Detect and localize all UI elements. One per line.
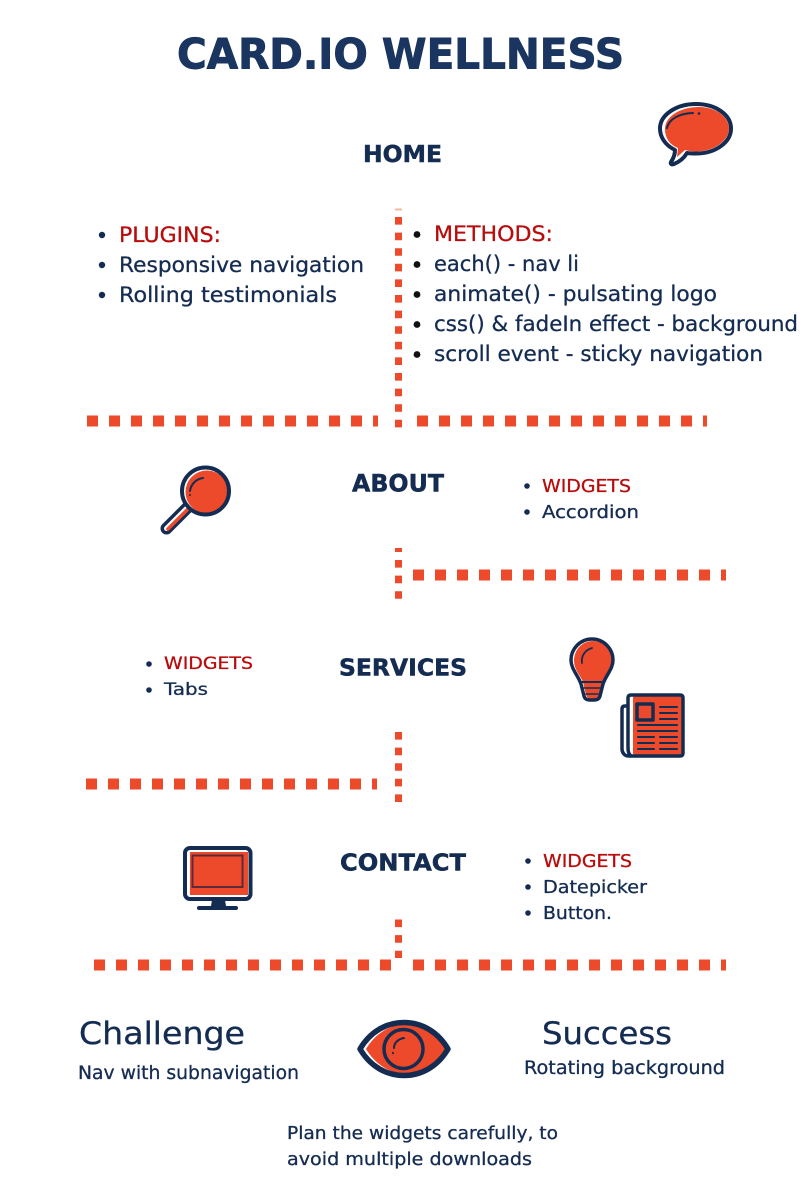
icon: eye [360, 1022, 448, 1076]
icon: monitor [185, 848, 250, 908]
list: contact widgets [525, 851, 648, 924]
list: services widgets [146, 654, 253, 700]
text: closing note [287, 1123, 558, 1170]
list: contact widgets: WIDGETS [543, 851, 632, 872]
list: plugins: PLUGINS: [119, 223, 221, 247]
list: about widgets: WIDGETS [542, 476, 631, 497]
list: contact widgets: Datepicker [543, 877, 648, 898]
text: challenge [78, 1016, 299, 1084]
list: methods: css() & fadeIn effect - background [434, 312, 798, 336]
list: methods: scroll event - sticky navigation [434, 342, 763, 366]
list: plugins: Responsive navigation [119, 253, 364, 277]
dotted connector: services [86, 732, 398, 802]
icon: light bulb [571, 639, 613, 700]
list: services widgets: WIDGETS [164, 654, 253, 674]
list: about widgets: Accordion [542, 502, 639, 523]
list: about widgets [524, 476, 639, 523]
text: challenge: Nav with subnavigation [78, 1062, 299, 1084]
icon: magnifying glass [166, 466, 230, 529]
text: closing note: avoid multiple downloads [287, 1149, 532, 1170]
title: CARD.IO WELLNESS [177, 30, 624, 78]
dotted connector: about [395, 548, 726, 600]
list: plugins: Rolling testimonials [119, 283, 337, 307]
dotted connector: home [87, 208, 707, 428]
heading: services: SERVICES [339, 656, 467, 682]
list: methods: each() - nav li [434, 252, 579, 276]
icon: newspaper [622, 695, 683, 756]
list: services widgets: Tabs [163, 680, 208, 700]
list: methods: animate() - pulsating logo [434, 282, 717, 306]
text: closing note: Plan the widgets carefully, to [287, 1123, 558, 1144]
list: contact widgets: Button. [543, 903, 612, 924]
dotted connector: contact [94, 920, 726, 965]
list: methods: METHODS: [434, 222, 553, 246]
heading: home: HOME [363, 142, 442, 168]
icon: speech bubble [660, 104, 731, 164]
heading: about: ABOUT [352, 470, 445, 498]
text: challenge: Challenge [79, 1016, 245, 1052]
text: success: Rotating background [524, 1057, 725, 1079]
heading: contact: CONTACT [340, 850, 466, 876]
list: plugins [99, 223, 364, 307]
text: success [524, 1016, 725, 1079]
text: success: Success [542, 1016, 672, 1052]
list: methods [414, 222, 798, 366]
